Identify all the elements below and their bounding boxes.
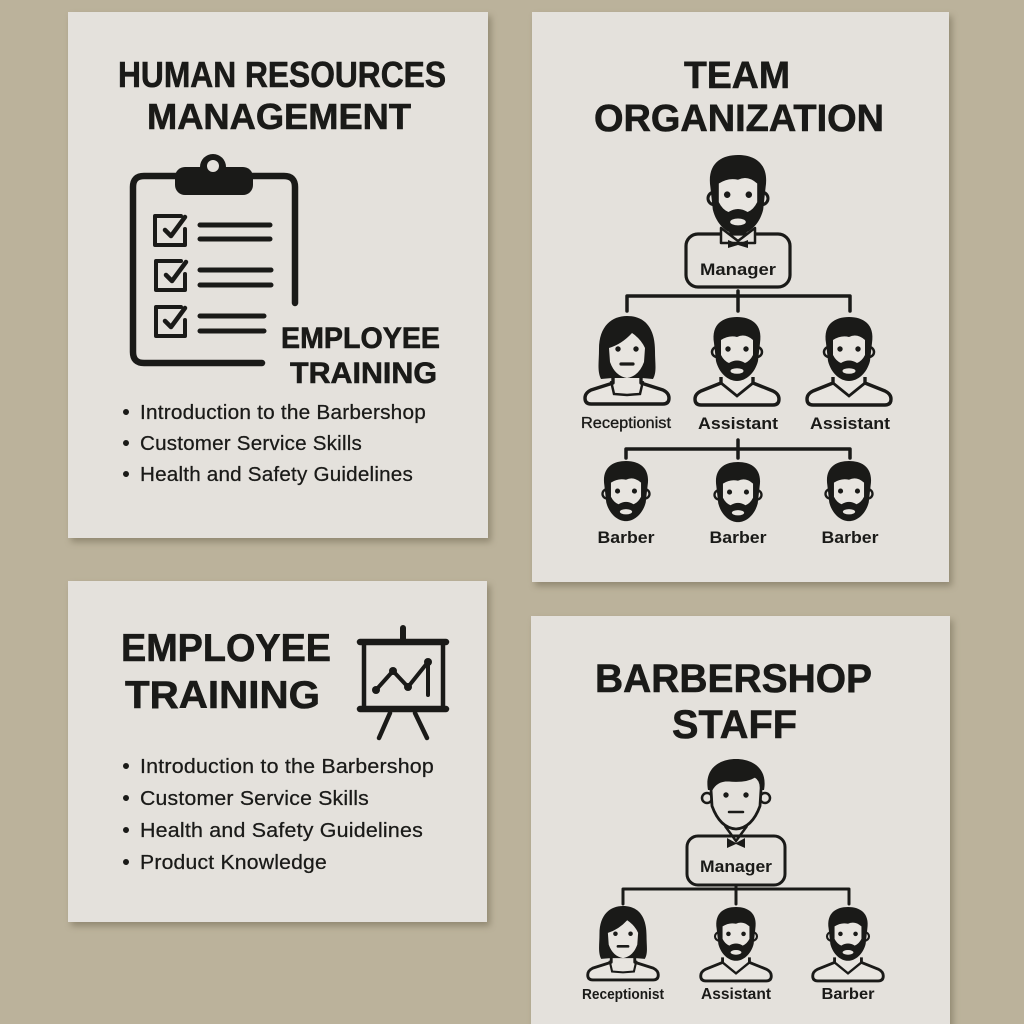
icon: presentation easel with chart: [360, 628, 446, 738]
bullet list: training topics: Customer Service Skills: [140, 788, 369, 810]
bullet list: training topics: [123, 402, 426, 486]
heading: human resources management: [118, 54, 446, 137]
icon: receptionist: Receptionist: [581, 415, 672, 432]
icon: manager: Manager: [700, 260, 776, 279]
subheading: employee training: [281, 322, 440, 390]
org chart connector: manager to staff: [627, 291, 850, 311]
heading: employee training: [121, 627, 331, 717]
icon: barber: Barber: [598, 528, 655, 547]
icon: barber: [813, 907, 883, 1003]
icon: assistant: [695, 317, 779, 433]
org chart connector: manager to staff: [623, 885, 849, 904]
icon: assistant: Assistant: [701, 986, 772, 1003]
icon: barber: [598, 461, 655, 547]
icon: assistant: Assistant: [698, 414, 778, 433]
icon: barber: [822, 461, 879, 547]
icon: assistant: [701, 907, 772, 1003]
heading: human resources management: MANAGEMENT: [147, 96, 411, 137]
heading: human resources management: HUMAN RESOURCES: [118, 54, 446, 95]
bullet list: training topics: Health and Safety Guidelines: [140, 820, 423, 842]
org chart connector: assistants to barbers: [626, 440, 850, 458]
heading: team organization: ORGANIZATION: [594, 98, 884, 140]
icon: manager: [686, 155, 790, 287]
icon: barber: [710, 462, 767, 547]
icon: barber: Barber: [822, 986, 874, 1003]
heading: employee training: TRAINING: [125, 674, 320, 717]
panel: barbershop staff: [531, 616, 953, 1024]
heading: team organization: [594, 55, 884, 140]
bullet list: training topics: [123, 756, 434, 874]
icon: assistant: Assistant: [810, 414, 890, 433]
icon: manager: [687, 759, 785, 885]
icon: receptionist: Receptionist: [582, 986, 664, 1003]
icon: clipboard checklist: [133, 154, 295, 363]
subheading: employee training: TRAINING: [290, 357, 437, 390]
icon: receptionist: [582, 906, 664, 1003]
icon: barber: Barber: [710, 528, 767, 547]
heading: barbershop staff: BARBERSHOP: [595, 657, 872, 701]
panel: human resources management: [68, 12, 491, 542]
heading: barbershop staff: [595, 657, 872, 747]
heading: barbershop staff: STAFF: [672, 703, 797, 747]
icon: receptionist: [581, 316, 672, 432]
bullet list: training topics: Product Knowledge: [140, 852, 327, 874]
panel: employee training: [68, 581, 490, 926]
heading: employee training: EMPLOYEE: [121, 627, 331, 670]
panel: team organization: [532, 12, 952, 586]
icon: manager: Manager: [700, 857, 772, 876]
heading: team organization: TEAM: [684, 55, 790, 97]
bullet list: training topics: Introduction to the Barbershop: [140, 402, 426, 424]
icon: assistant: [807, 317, 891, 433]
icon: barber: Barber: [822, 528, 879, 547]
bullet list: training topics: Health and Safety Guidelines: [140, 464, 413, 486]
bullet list: training topics: Customer Service Skills: [140, 433, 362, 455]
subheading: employee training: EMPLOYEE: [281, 322, 440, 355]
bullet list: training topics: Introduction to the Barbershop: [140, 756, 434, 778]
